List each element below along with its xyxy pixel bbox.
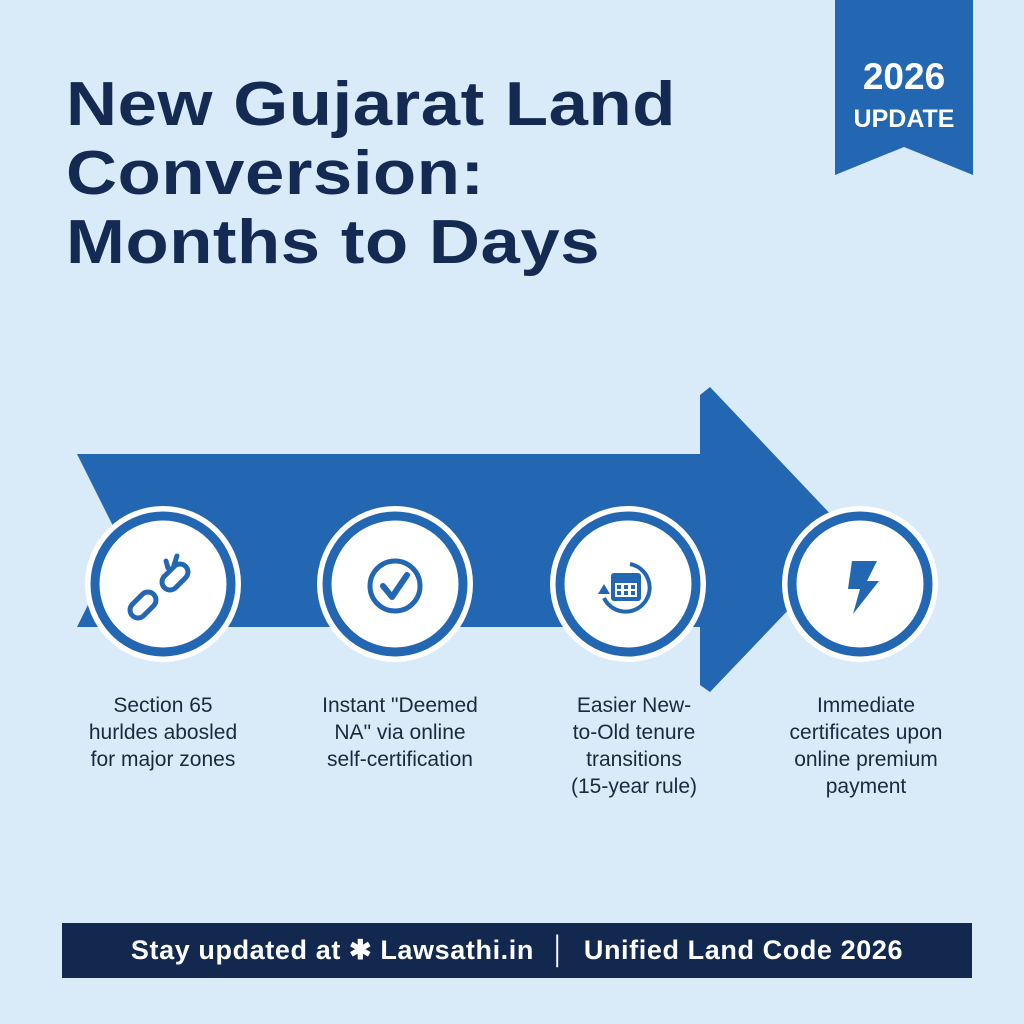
caption 1: for major zones [91, 748, 235, 771]
caption 3: (15-year rule) [571, 775, 697, 798]
ribbon badge: 2026 [863, 56, 945, 97]
caption 3 [571, 694, 697, 798]
arrow [77, 387, 855, 692]
title: Months to Days [66, 208, 600, 277]
footer bar [62, 923, 972, 978]
caption 2: Instant "Deemed [322, 694, 478, 717]
caption 1: hurldes abosled [89, 721, 237, 744]
caption 3: transitions [586, 748, 682, 771]
step icon: lightning [782, 506, 938, 662]
caption 3: Easier New- [577, 694, 691, 717]
title [66, 70, 676, 277]
caption 2: self-certification [327, 748, 473, 771]
caption 2 [322, 694, 478, 771]
title: New Gujarat Land [66, 70, 676, 139]
footer bar: Stay updated at ✱ Lawsathi.in │ Unified Land Code 2026 [131, 935, 903, 965]
caption 2: NA" via online [334, 721, 466, 744]
title: Conversion: [66, 139, 485, 208]
step icon: calendar [550, 506, 706, 662]
caption 4: certificates upon [790, 721, 942, 744]
caption 4: Immediate [817, 694, 915, 717]
caption 4: online premium [794, 748, 938, 771]
caption 4 [790, 694, 942, 798]
ribbon badge [835, 0, 973, 175]
step icon: check [317, 506, 473, 662]
caption 4: payment [826, 775, 906, 798]
ribbon badge: UPDATE [854, 105, 954, 133]
caption 1 [89, 694, 237, 771]
step icon: chain [85, 506, 241, 662]
caption 1: Section 65 [113, 694, 213, 717]
caption 3: to-Old tenure [573, 721, 695, 744]
